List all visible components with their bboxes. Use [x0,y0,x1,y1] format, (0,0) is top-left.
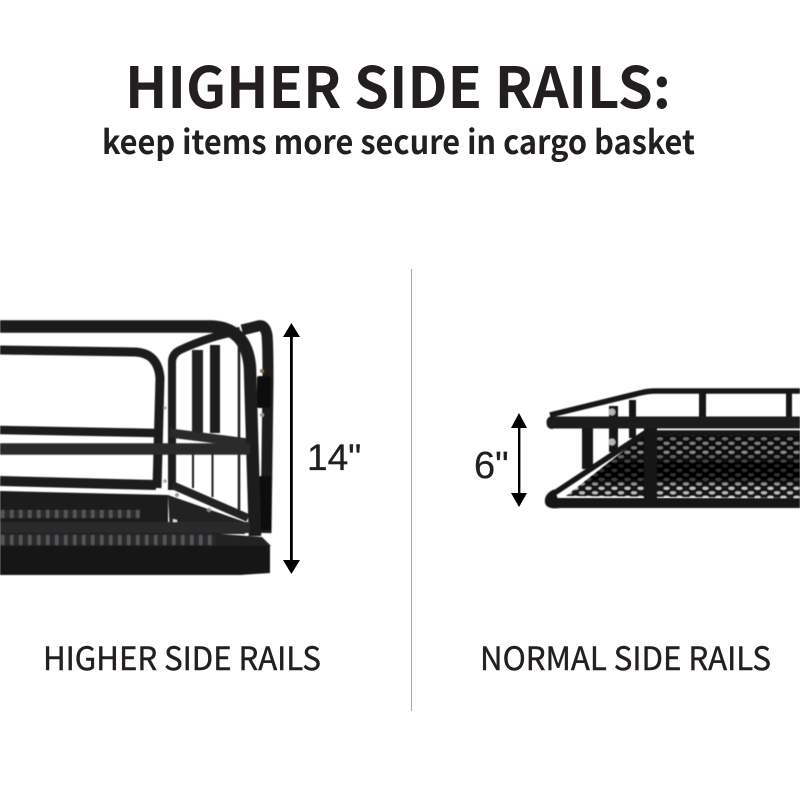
front uprights [582,428,657,498]
front bottom rail [550,494,800,503]
back rail [550,391,800,415]
arrow: 6 inch height [511,413,527,507]
back uprights [609,392,792,452]
base plate [0,545,270,575]
floor side rail [553,433,800,494]
arrow: 14 inch height [283,323,300,574]
illustration: basket with higher side rails [0,326,271,575]
caption: higher side rails: HIGHER SIDE RAILS [43,634,321,680]
bolts [608,408,616,446]
illustration: basket with normal side rails [547,391,800,503]
mesh floor [566,434,800,498]
subtitle: keep items more secure in cargo basket [102,116,695,164]
back panel rails [0,350,160,488]
center divider [410,269,412,711]
title: HIGHER SIDE RAILS: [125,43,671,125]
front top rail [553,416,800,428]
label: 14 inches: 14" [307,437,361,478]
side gate uprights [192,343,239,510]
label: 6 inches: 6" [474,445,509,487]
caption: normal side rails: NORMAL SIDE RAILS [480,634,771,680]
front rails [0,326,255,536]
hinges [163,369,271,530]
mesh shading [566,434,800,498]
side gate frame [170,326,268,533]
mesh floor [0,491,271,546]
